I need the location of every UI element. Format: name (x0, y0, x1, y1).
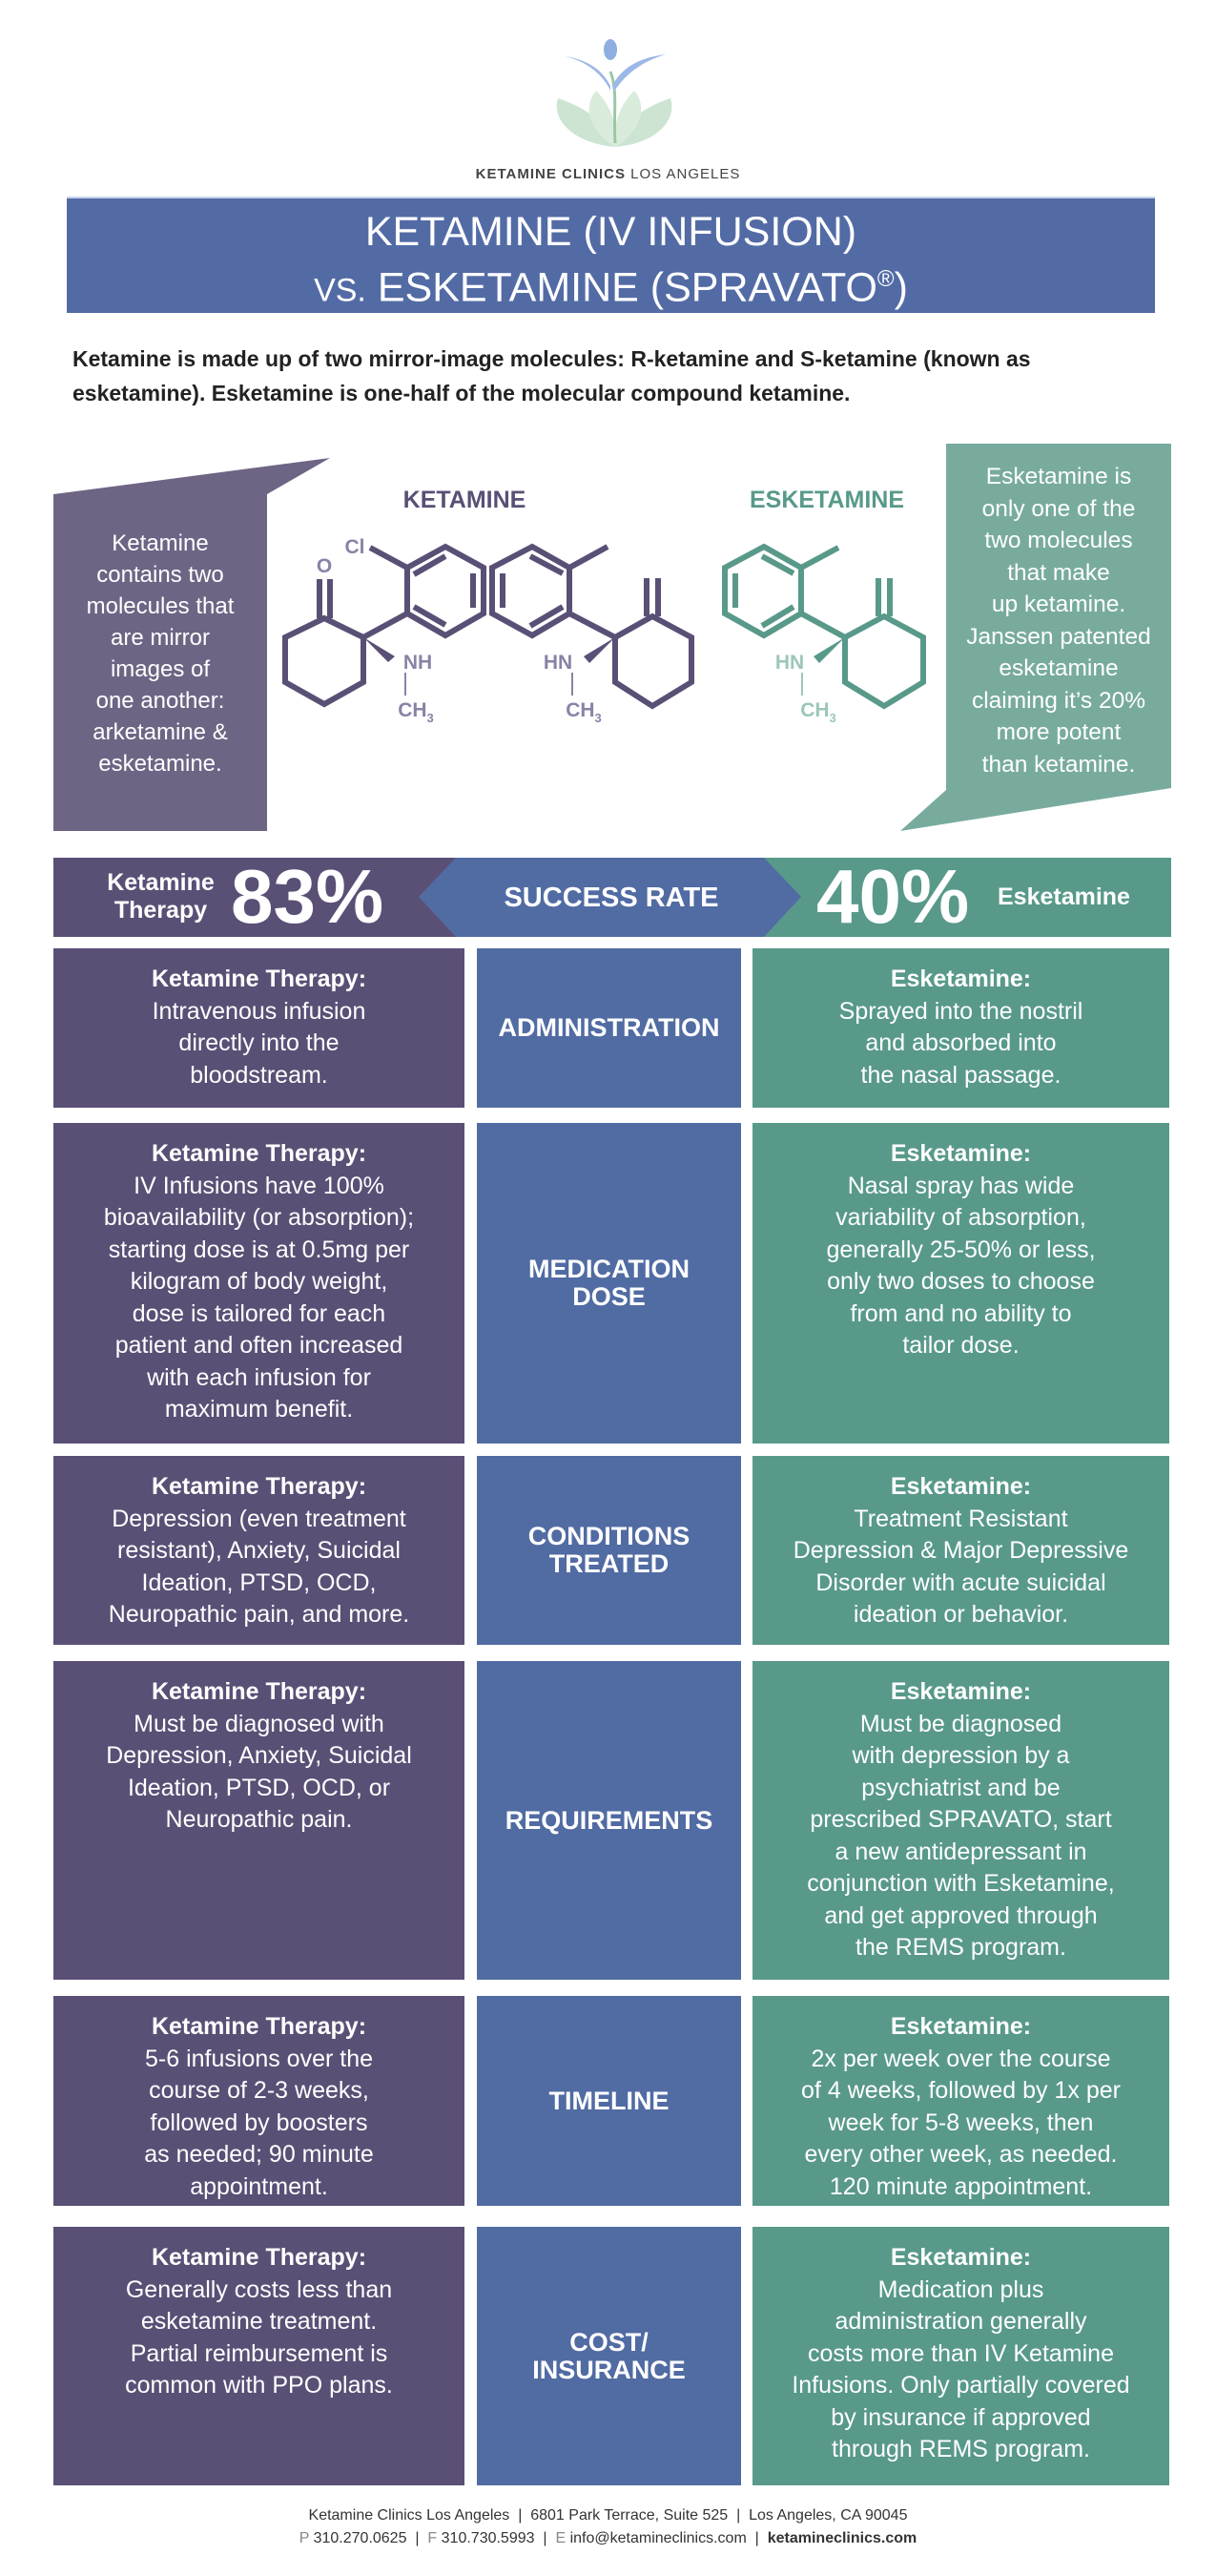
row: timeline: as needed; 90 minute (144, 2141, 374, 2168)
footer (299, 2507, 917, 2546)
row: timeline: week for 5-8 weeks, then (829, 2109, 1093, 2135)
row: medication dose: only two doses to choose (827, 1268, 1095, 1295)
row: conditions treated: Ideation, PTSD, OCD, (142, 1568, 376, 1595)
title (67, 197, 1155, 313)
row: cost / insurance: Ketamine Therapy: (152, 2244, 366, 2271)
row: timeline: 120 minute appointment. (830, 2173, 1092, 2200)
row: medication dose: tailor dose. (902, 1332, 1020, 1359)
row: medication dose: maximum benefit. (165, 1396, 353, 1423)
row: cost / insurance: COST/ (569, 2328, 649, 2357)
callout: esketamine right: than ketamine. (982, 752, 1135, 777)
row: requirements (53, 1661, 1169, 1980)
esketamine label: ESKETAMINE (750, 487, 904, 513)
row: conditions treated: Neuropathic pain, and more. (109, 1601, 409, 1628)
row: administration (53, 948, 1169, 1108)
row: conditions treated (53, 1456, 1169, 1645)
row: conditions treated: CONDITIONS (528, 1522, 690, 1550)
row: administration: directly into the (178, 1029, 340, 1056)
chart: molecule structures (282, 487, 926, 725)
row: cost / insurance: through REMS program. (832, 2436, 1090, 2462)
row: cost / insurance: common with PPO plans. (125, 2372, 393, 2399)
row: timeline: Esketamine: (891, 2013, 1031, 2040)
callout: esketamine right: Esketamine is (986, 464, 1131, 489)
row: timeline: course of 2-3 weeks, (149, 2077, 369, 2104)
title: KETAMINE (IV INFUSION) (365, 209, 856, 255)
row: requirements: conjunction with Esketamine, (807, 1870, 1115, 1897)
row: conditions treated: Ketamine Therapy: (152, 1473, 366, 1500)
row: requirements: Ideation, PTSD, OCD, or (128, 1775, 390, 1801)
title: VS. ESKETAMINE (SPRAVATO®) (314, 264, 908, 310)
row: conditions treated: Treatment Resistant (854, 1506, 1068, 1532)
row: conditions treated: resistant), Anxiety, Suicidal (117, 1537, 401, 1564)
footer: Ketamine Clinics Los Angeles | 6801 Park Terrace, Suite 525 | Los Angeles, CA 90045 (309, 2507, 907, 2524)
ketamine molecule (285, 547, 691, 706)
icon: leaves (557, 91, 671, 147)
logo (557, 39, 671, 147)
row: medication dose: generally 25-50% or less, (826, 1236, 1096, 1263)
intro text: esketamine). Esketamine is one-half of the molecular compound ketamine. (72, 381, 850, 405)
callout: esketamine right: esketamine (999, 655, 1119, 681)
callout: esketamine right: more potent (997, 719, 1121, 745)
row: timeline: TIMELINE (549, 2086, 670, 2114)
row: conditions treated: ideation or behavior. (854, 1601, 1068, 1628)
row: cost / insurance: Medication plus (878, 2276, 1043, 2303)
callout: ketamine left: contains two (96, 562, 224, 588)
row: conditions treated: Depression & Major Depressive (793, 1537, 1128, 1564)
row: medication dose: DOSE (572, 1282, 646, 1311)
chart: molecule structures: 3 (427, 711, 434, 725)
row: medication dose: from and no ability to (850, 1299, 1072, 1326)
callout: ketamine left (53, 458, 330, 831)
callout: esketamine right: only one of the (982, 496, 1135, 521)
esketamine molecule (725, 547, 923, 706)
row: requirements: Depression, Anxiety, Suicidal (106, 1742, 412, 1769)
callout: ketamine left: molecules that (87, 593, 234, 619)
row: cost / insurance: esketamine treatment. (141, 2308, 377, 2335)
callout: ketamine left: images of (111, 656, 210, 682)
intro text: Ketamine is made up of two mirror-image molecules: R-ketamine and S-ketamine (known as (72, 346, 1031, 371)
callout: ketamine left: are mirror (111, 625, 210, 651)
row: administration: ADMINISTRATION (498, 1013, 719, 1042)
chart: molecule structures: HN (775, 652, 804, 674)
row: conditions treated: Depression (even treatment (112, 1506, 406, 1532)
row: cost / insurance: Infusions. Only partially covered (792, 2372, 1130, 2399)
chart: molecule structures: NH (403, 652, 432, 674)
callout: ketamine left: one another: (96, 688, 224, 714)
row: cost / insurance: by insurance if approved (831, 2404, 1091, 2431)
row: timeline: Ketamine Therapy: (152, 2013, 366, 2040)
row: medication dose: Esketamine: (891, 1140, 1031, 1167)
callout: ketamine left: esketamine. (98, 751, 222, 777)
row: medication dose: variability of absorption, (835, 1204, 1086, 1231)
row: requirements: a new antidepressant in (835, 1838, 1087, 1864)
row: medication dose: patient and often increased (115, 1332, 402, 1359)
callout: ketamine left: Ketamine (112, 530, 209, 556)
83%: 83% (231, 854, 383, 939)
row: medication dose: with each infusion for (147, 1364, 371, 1391)
chart: molecule structures: O (317, 555, 332, 577)
footer: P 310.270.0625 | F 310.730.5993 | E info@ketamineclinics.com | ketamineclinics.com (299, 2530, 917, 2546)
row: timeline: appointment. (190, 2173, 328, 2200)
esketamine label: Esketamine (998, 883, 1130, 910)
row: conditions treated: Esketamine: (891, 1473, 1031, 1500)
callout: esketamine right: that make (1007, 559, 1110, 586)
logo text: KETAMINE CLINICS LOS ANGELES (476, 166, 740, 182)
callout: esketamine right: Janssen patented (966, 624, 1151, 649)
row: administration: Ketamine Therapy: (152, 966, 366, 992)
chart: molecule structures: CH (800, 699, 830, 721)
row: requirements: Esketamine: (891, 1678, 1031, 1705)
callout: esketamine right (900, 444, 1171, 831)
chart: molecule structures: 3 (830, 711, 836, 725)
row: medication dose: kilogram of body weight, (131, 1268, 387, 1295)
row: administration: Esketamine: (891, 966, 1031, 992)
row: cost / insurance (53, 2227, 1169, 2485)
row: cost / insurance: INSURANCE (532, 2355, 686, 2383)
row: requirements: REQUIREMENTS (505, 1805, 712, 1834)
chart: molecule structures: CH (566, 699, 595, 721)
row: cost / insurance: Partial reimbursement is (131, 2339, 387, 2366)
row: requirements: Must be diagnosed with (134, 1710, 384, 1736)
row: medication dose: Nasal spray has wide (848, 1172, 1074, 1198)
40%: 40% (816, 854, 969, 939)
chart: molecule structures: CH (398, 699, 427, 721)
ketamine label: KETAMINE (403, 487, 526, 513)
row: administration: Sprayed into the nostril (839, 998, 1082, 1025)
row: requirements: and get approved through (824, 1902, 1098, 1929)
row: timeline: every other week, as needed. (805, 2141, 1117, 2168)
intro text (72, 346, 1031, 405)
row: timeline: 2x per week over the course (811, 2046, 1111, 2072)
row: requirements: prescribed SPRAVATO, start (810, 1806, 1112, 1833)
row: medication dose: Ketamine Therapy: (152, 1140, 366, 1167)
callout: ketamine left: arketamine & (93, 719, 228, 745)
row: requirements: Ketamine Therapy: (152, 1678, 366, 1705)
row: medication dose: MEDICATION (528, 1255, 690, 1283)
row: cost / insurance: administration generally (835, 2308, 1087, 2335)
row: conditions treated: Disorder with acute suicidal (815, 1568, 1106, 1595)
row: administration: Intravenous infusion (153, 998, 365, 1025)
row: timeline: followed by boosters (151, 2109, 367, 2135)
row: cost / insurance: Generally costs less than (126, 2276, 392, 2303)
success rate bar (53, 854, 1171, 939)
row: medication dose: IV Infusions have 100% (134, 1172, 384, 1198)
callout: esketamine right: two molecules (984, 528, 1133, 553)
row: cost / insurance: Esketamine: (891, 2244, 1031, 2271)
row: medication dose (53, 1123, 1169, 1444)
chart: molecule structures: HN (544, 652, 572, 674)
row: timeline: 5-6 infusions over the (145, 2046, 373, 2072)
chart: molecule structures: Cl (345, 536, 364, 558)
row: conditions treated: TREATED (549, 1549, 669, 1578)
row: medication dose: dose is tailored for each (133, 1299, 385, 1326)
row: requirements: psychiatrist and be (861, 1775, 1061, 1801)
row: timeline: of 4 weeks, followed by 1x per (801, 2077, 1121, 2104)
callout: esketamine right: up ketamine. (992, 592, 1125, 617)
ketamine therapy label: Ketamine (107, 869, 215, 896)
row: medication dose: bioavailability (or absorption); (104, 1204, 414, 1231)
success rate text: SUCCESS RATE (504, 883, 719, 913)
ketamine therapy label (107, 869, 215, 924)
callout: esketamine right: claiming it’s 20% (972, 687, 1145, 714)
row: medication dose: starting dose is at 0.5mg per (109, 1236, 409, 1263)
row: requirements: Neuropathic pain. (166, 1806, 352, 1833)
row: timeline (53, 1996, 1169, 2206)
row: requirements: with depression by a (853, 1742, 1069, 1769)
row: administration: the nasal passage. (861, 1061, 1061, 1088)
ketamine therapy label: Therapy (114, 897, 207, 924)
row: administration: bloodstream. (190, 1061, 328, 1088)
row: requirements: the REMS program. (855, 1934, 1066, 1961)
row: cost / insurance: costs more than IV Ketamine (808, 2339, 1114, 2366)
row: administration: and absorbed into (865, 1029, 1057, 1056)
row: requirements: Must be diagnosed (860, 1710, 1061, 1736)
chart: molecule structures: 3 (595, 711, 602, 725)
